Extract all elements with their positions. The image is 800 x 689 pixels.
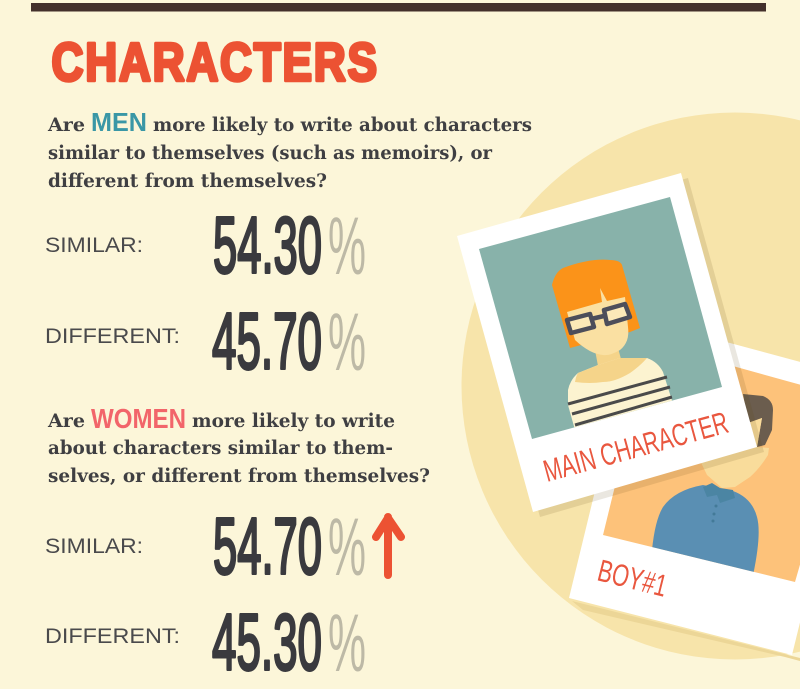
men different stat — [45, 296, 366, 388]
men similar stat — [45, 200, 366, 292]
caption: boy #1: BOY#1 — [594, 553, 671, 604]
question about men: similar to themselves (such as memoirs), or — [48, 142, 493, 164]
girl figure — [552, 260, 675, 430]
women different stat: % — [328, 598, 366, 689]
top divider bar — [31, 3, 766, 12]
question about women: more likely to write — [192, 410, 395, 432]
icon: glasses — [567, 304, 630, 333]
question about women — [47, 403, 430, 487]
question about women: selves, or different from themselves? — [48, 465, 430, 487]
question about men: more likely to write about characters — [153, 114, 532, 136]
background circle — [462, 112, 800, 660]
polaroid: main character — [457, 173, 764, 517]
boy figure — [652, 394, 773, 580]
question about women: Are — [47, 410, 85, 432]
men different stat: % — [328, 297, 366, 388]
women similar stat — [45, 502, 366, 593]
polaroid: boy #1 — [569, 318, 800, 661]
men similar stat: % — [328, 201, 366, 292]
question about women: about characters similar to them- — [48, 437, 393, 459]
highlighted word: men: MEN — [91, 107, 147, 137]
women similar stat: % — [328, 502, 366, 593]
question about men: different from themselves? — [48, 170, 327, 192]
question about men — [47, 107, 532, 192]
question about men: Are — [47, 114, 85, 136]
highlighted word: women: WOMEN — [91, 403, 186, 434]
men similar stat: SIMILAR: — [45, 234, 143, 257]
men similar stat: 54.30 — [213, 200, 322, 290]
title: CHARACTERS — [52, 32, 377, 93]
women similar stat: SIMILAR: — [45, 535, 143, 558]
women similar stat: 54.70 — [213, 502, 322, 590]
men different stat: DIFFERENT: — [45, 325, 180, 348]
men different stat: 45.70 — [212, 296, 322, 386]
women different stat — [45, 598, 366, 689]
women different stat: DIFFERENT: — [45, 625, 180, 648]
women different stat: 45.30 — [212, 598, 322, 686]
icon: up arrow — [376, 517, 401, 575]
